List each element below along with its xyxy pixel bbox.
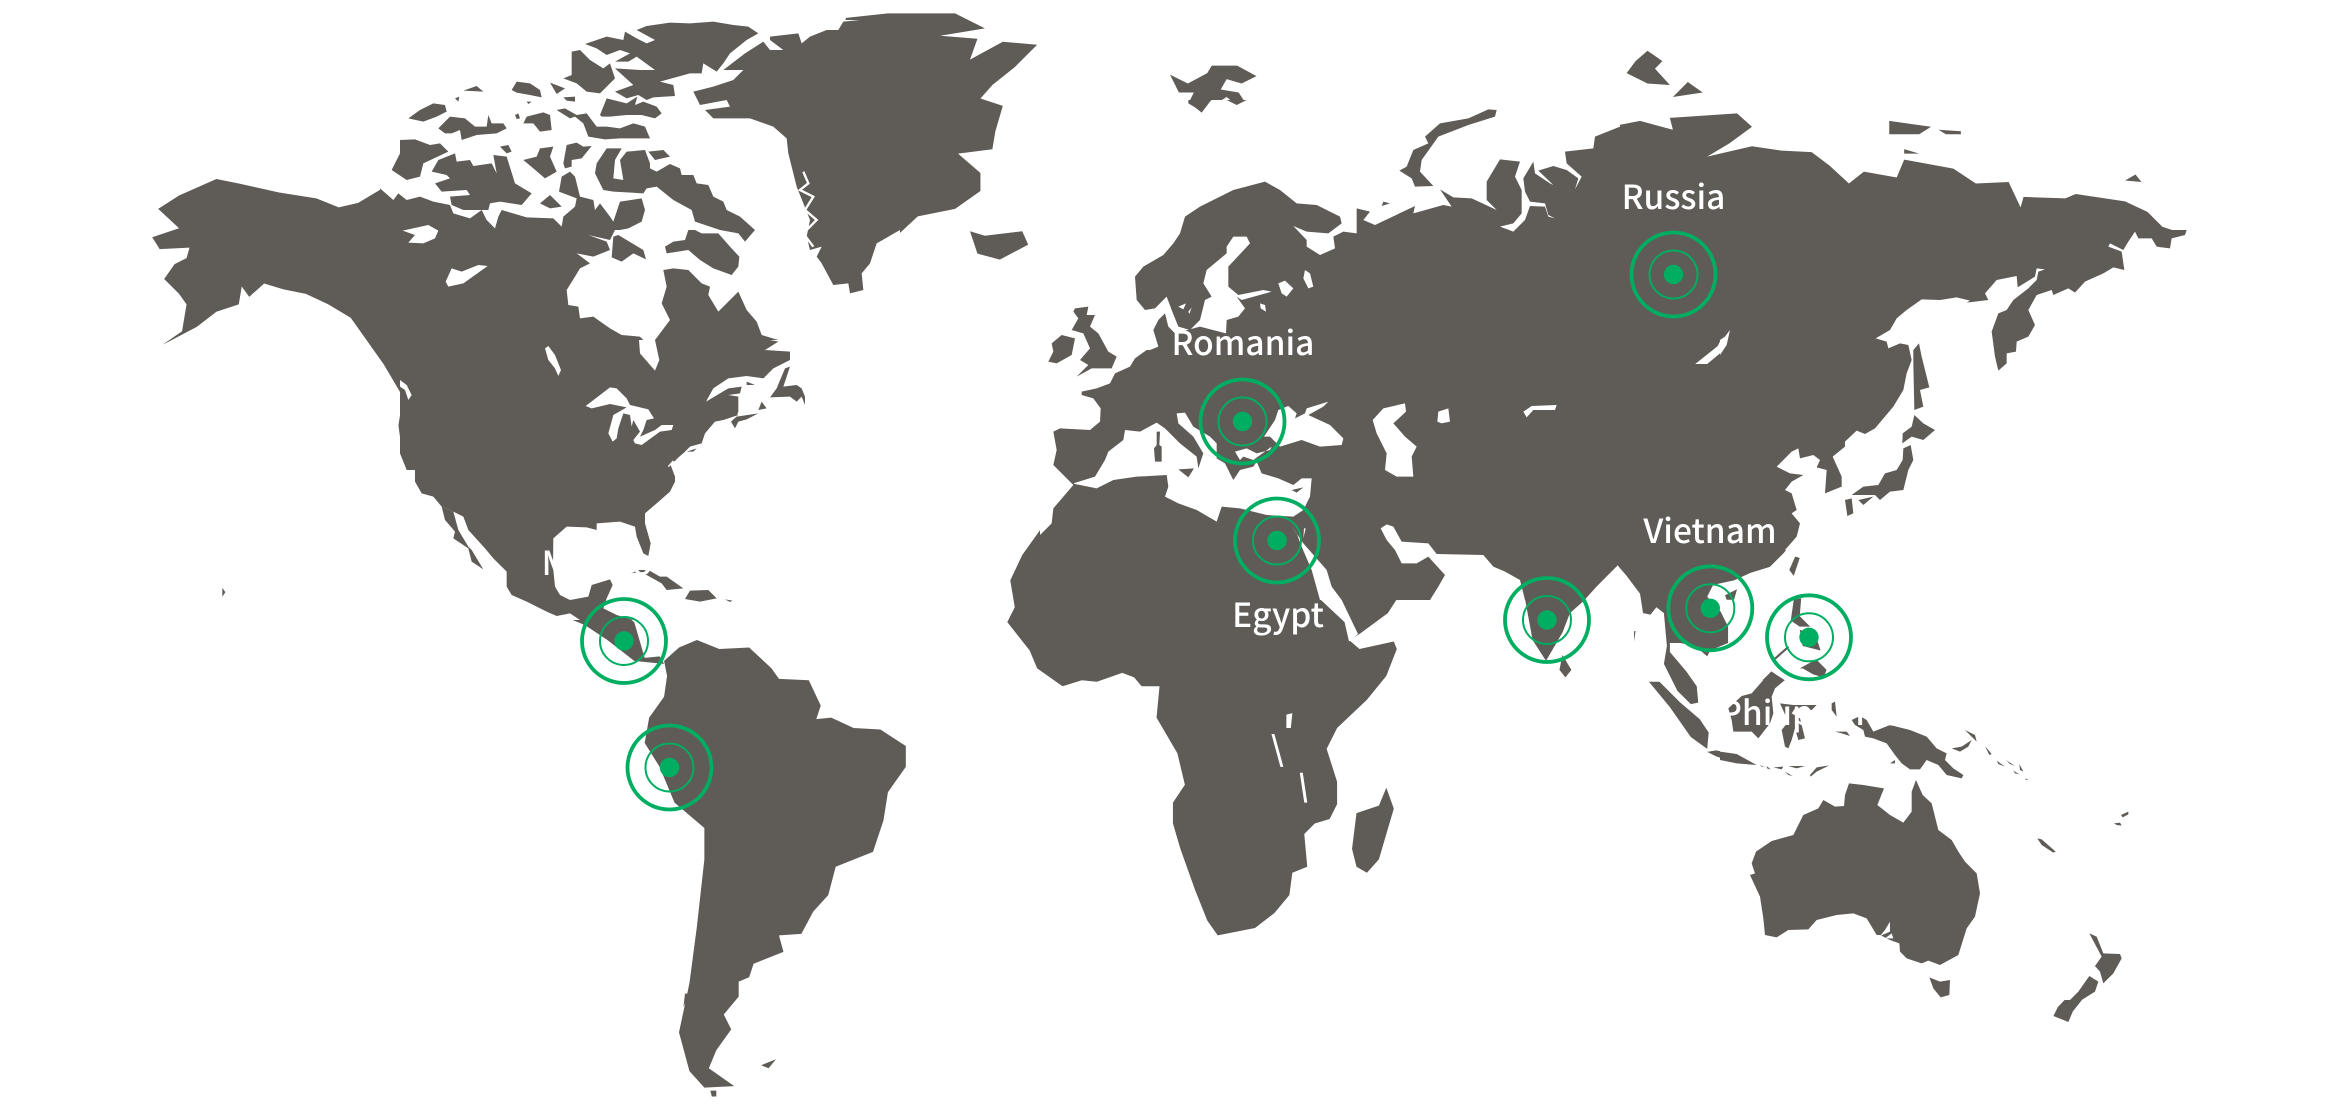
label: Egypt: Egypt <box>1232 588 1324 637</box>
Eurasia and Africa <box>1007 113 2185 935</box>
marker: Romania <box>1200 380 1284 464</box>
marker: Egypt <box>1235 498 1319 582</box>
region: Indonesia, Australia and Pacific islands <box>1720 680 2240 1000</box>
continent: North America west <box>152 179 791 664</box>
marker: Philippines <box>1767 595 1851 679</box>
marker: Russia <box>1632 232 1716 316</box>
region: Canadian Arctic and west Greenland <box>380 20 900 340</box>
lakes and Red Sea <box>1271 331 1725 803</box>
marker: India <box>1505 578 1589 662</box>
Greenland, Iceland and Arctic Ocean islands <box>694 13 2141 294</box>
label: Russia: Russia <box>1622 170 1725 219</box>
marker: Central America <box>582 599 666 683</box>
label: Mexico: Mexico <box>542 536 652 585</box>
islands: Great Britain and Ireland <box>1048 307 1117 377</box>
region: Scandinavia and northwest Russia <box>1100 100 1620 350</box>
label: Vietnam: Vietnam <box>1642 504 1777 553</box>
marker: Vietnam <box>1668 566 1752 650</box>
marker: Peru <box>628 726 712 810</box>
continent: South America <box>645 640 906 1097</box>
label: Romania: Romania <box>1172 316 1314 365</box>
region: eastern North America and Caribbean <box>400 340 920 620</box>
islands of Asia and Africa <box>1352 556 2095 1022</box>
label: Philippines: Philippines <box>1720 686 1900 735</box>
region: Russian Far East, Korea and Japan <box>1720 230 2240 550</box>
region: Europe, Mediterranean and Middle East <box>1040 350 1560 600</box>
